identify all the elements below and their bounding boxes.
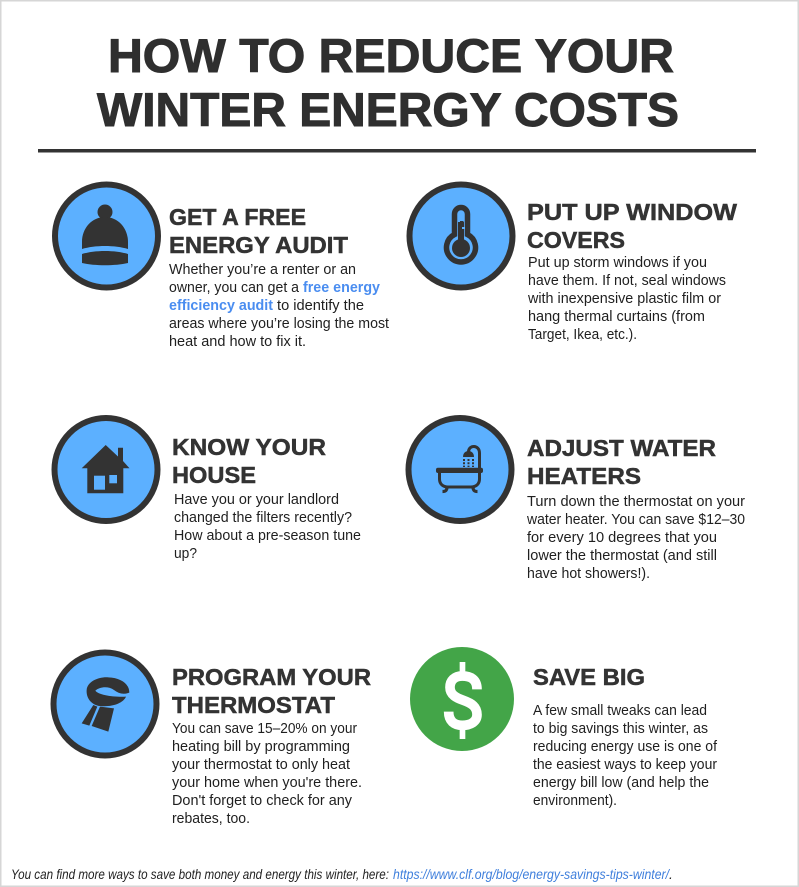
heading [172,434,326,488]
heading: HEATERS [527,463,641,489]
icon: thermometer [410,184,512,288]
body text: your home when you're there. [172,775,362,791]
body text: heat and how to fix it. [169,334,306,350]
panel: know your house [54,418,361,562]
heading: KNOW YOUR [172,434,326,460]
body text: energy bill low (and help the [533,775,709,791]
body text: Target, Ikea, etc.). [528,327,637,343]
body text [169,262,389,350]
body text: Whether you’re a renter or an [169,262,356,278]
title: HOW TO REDUCE YOUR [108,29,674,82]
footer note with link [11,866,673,882]
title [97,29,679,136]
body text [527,255,726,343]
panel: window covers [410,184,738,343]
heading [527,199,738,253]
body text [174,492,361,562]
body text: have hot showers!). [527,566,650,582]
heading: SAVE BIG [533,664,645,690]
body text: lower the thermostat (and still [527,548,717,564]
heading: COVERS [527,227,625,253]
body text: reducing energy use is one of [533,739,718,755]
heading: THERMOSTAT [172,692,336,718]
body text: rebates, too. [172,811,250,827]
body text: Have you or your landlord [174,492,339,508]
heading [172,664,371,718]
body text: owner, you can get a [169,280,300,296]
heading [169,204,349,258]
body text: Turn down the thermostat on your [527,494,745,510]
body text: up? [174,546,197,562]
body text: your thermostat to only heat [172,757,350,773]
footer note with link: You can find more ways to save both money and energy this winter, here: [11,866,389,882]
icon: winter hat [55,184,158,288]
body text: to identify the [277,298,364,314]
panel: free energy audit [55,184,389,350]
icon: house [54,418,158,521]
heading: PROGRAM YOUR [172,664,371,690]
icon: scarf [54,652,156,756]
body text: water heater. You can save $12–30 [526,512,745,528]
body text: environment). [533,793,617,809]
heading: GET A FREE [169,204,306,230]
panel: program your thermostat [54,652,371,827]
heading: ADJUST WATER [527,435,716,461]
body text: You can save 15–20% on your [172,721,357,737]
body text: How about a pre-season tune [174,528,361,544]
body text: free energy [303,280,380,296]
panel: adjust water heaters [408,418,745,582]
icon: dollar sign [410,647,514,751]
heading: HOUSE [172,462,256,488]
body text: the easiest ways to keep your [533,757,717,773]
title: WINTER ENERGY COSTS [97,83,679,136]
body text [172,721,362,827]
body text: heating bill by programming [172,739,350,755]
body text: hang thermal curtains (from [528,309,705,325]
body text: areas where you’re losing the most [169,316,389,332]
body text: A few small tweaks can lead [533,703,707,719]
heading [527,435,716,489]
body text: for every 10 degrees that you [527,530,717,546]
body text: with inexpensive plastic film or [527,291,721,307]
body text: to big savings this winter, as [533,721,708,737]
body text: changed the filters recently? [174,510,352,526]
body text [533,703,718,809]
footer note with link: . [669,866,673,882]
heading: PUT UP WINDOW [527,199,738,225]
body text [526,494,745,582]
footer note with link: https://www.clf.org/blog/energy-savings-tips-winter/ [393,866,671,882]
heading: ENERGY AUDIT [169,232,349,258]
body text: Put up storm windows if you [528,255,707,271]
body text: have them. If not, seal windows [528,273,726,289]
icon: bathtub with shower [408,418,512,521]
panel: save big [410,647,718,809]
body text: efficiency audit [169,298,273,314]
body text: Don't forget to check for any [172,793,353,809]
